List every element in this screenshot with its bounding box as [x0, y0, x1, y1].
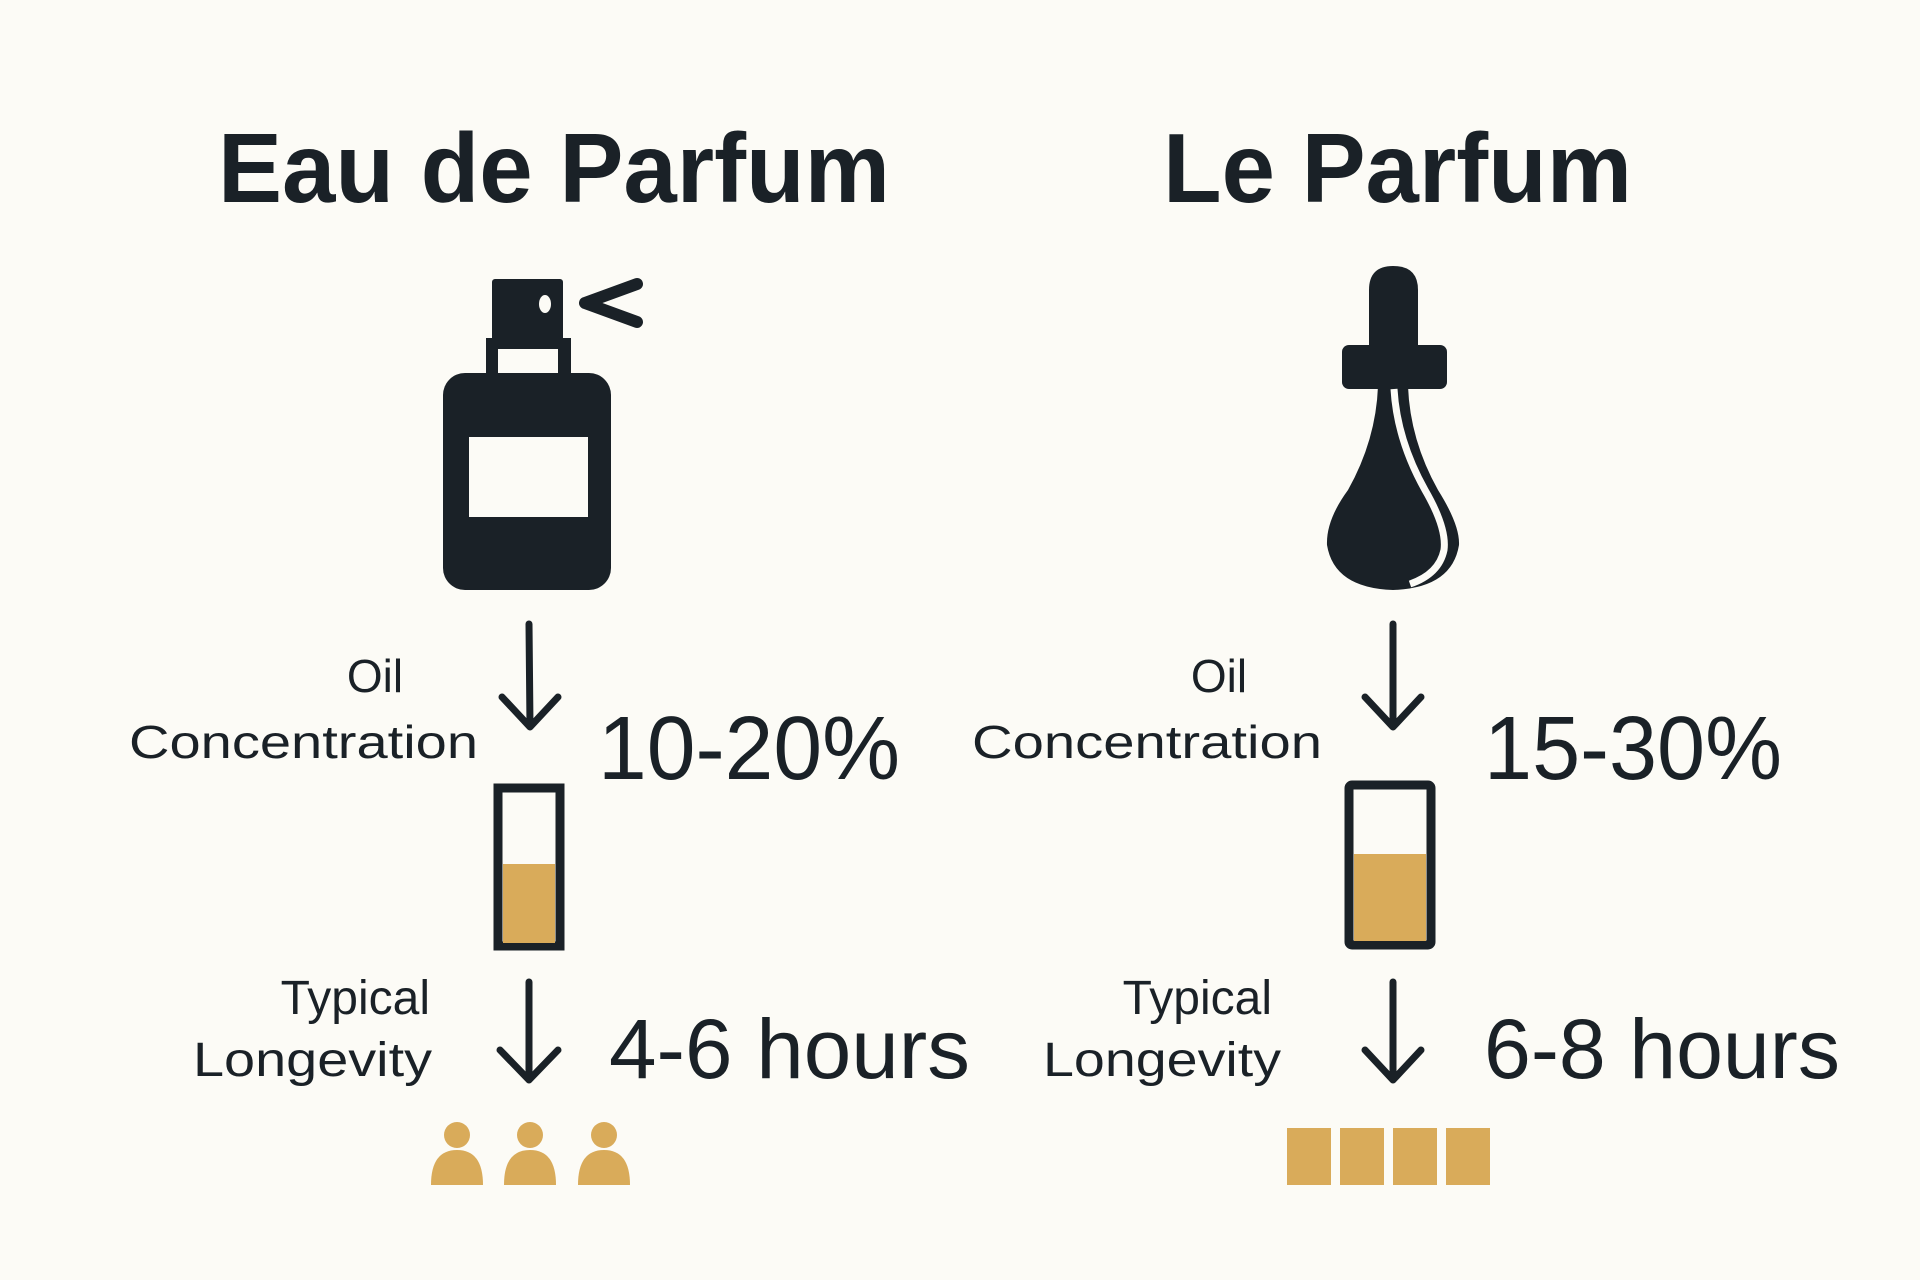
icon: spray bottle [443, 279, 637, 590]
label: oil concentration right: Concentration [972, 716, 1322, 768]
icon: three people [431, 1122, 630, 1185]
label: oil concentration left: Concentration [129, 716, 478, 768]
value: 10-20%: 10-20% [598, 699, 900, 799]
title: Le Parfum: Le Parfum [1163, 113, 1632, 223]
label: oil concentration left [129, 650, 478, 768]
arrow: oil concentration right [1365, 624, 1421, 727]
label: oil concentration right: Oil [1191, 650, 1247, 702]
arrow: oil concentration left [502, 624, 558, 727]
value: 4-6 hours: 4-6 hours [609, 1002, 970, 1096]
title: Eau de Parfum: Eau de Parfum [218, 113, 890, 223]
label: typical longevity left [193, 972, 432, 1087]
arrow: longevity left [500, 982, 558, 1080]
label: typical longevity right [1043, 972, 1281, 1087]
icon: tube 10-20% [498, 788, 560, 946]
icon: dropper [1327, 266, 1459, 590]
label: typical longevity right: Typical [1123, 972, 1272, 1025]
label: oil concentration right [972, 650, 1322, 768]
value: 6-8 hours: 6-8 hours [1484, 1002, 1840, 1096]
label: typical longevity left: Longevity [193, 1034, 432, 1087]
icon: tube 15-30% [1349, 785, 1431, 945]
label: oil concentration left: Oil [347, 650, 403, 702]
label: typical longevity left: Typical [281, 972, 430, 1025]
arrow: longevity right [1365, 982, 1421, 1080]
label: typical longevity right: Longevity [1043, 1034, 1281, 1087]
icon: four blocks [1287, 1128, 1490, 1185]
value: 15-30%: 15-30% [1484, 699, 1782, 799]
